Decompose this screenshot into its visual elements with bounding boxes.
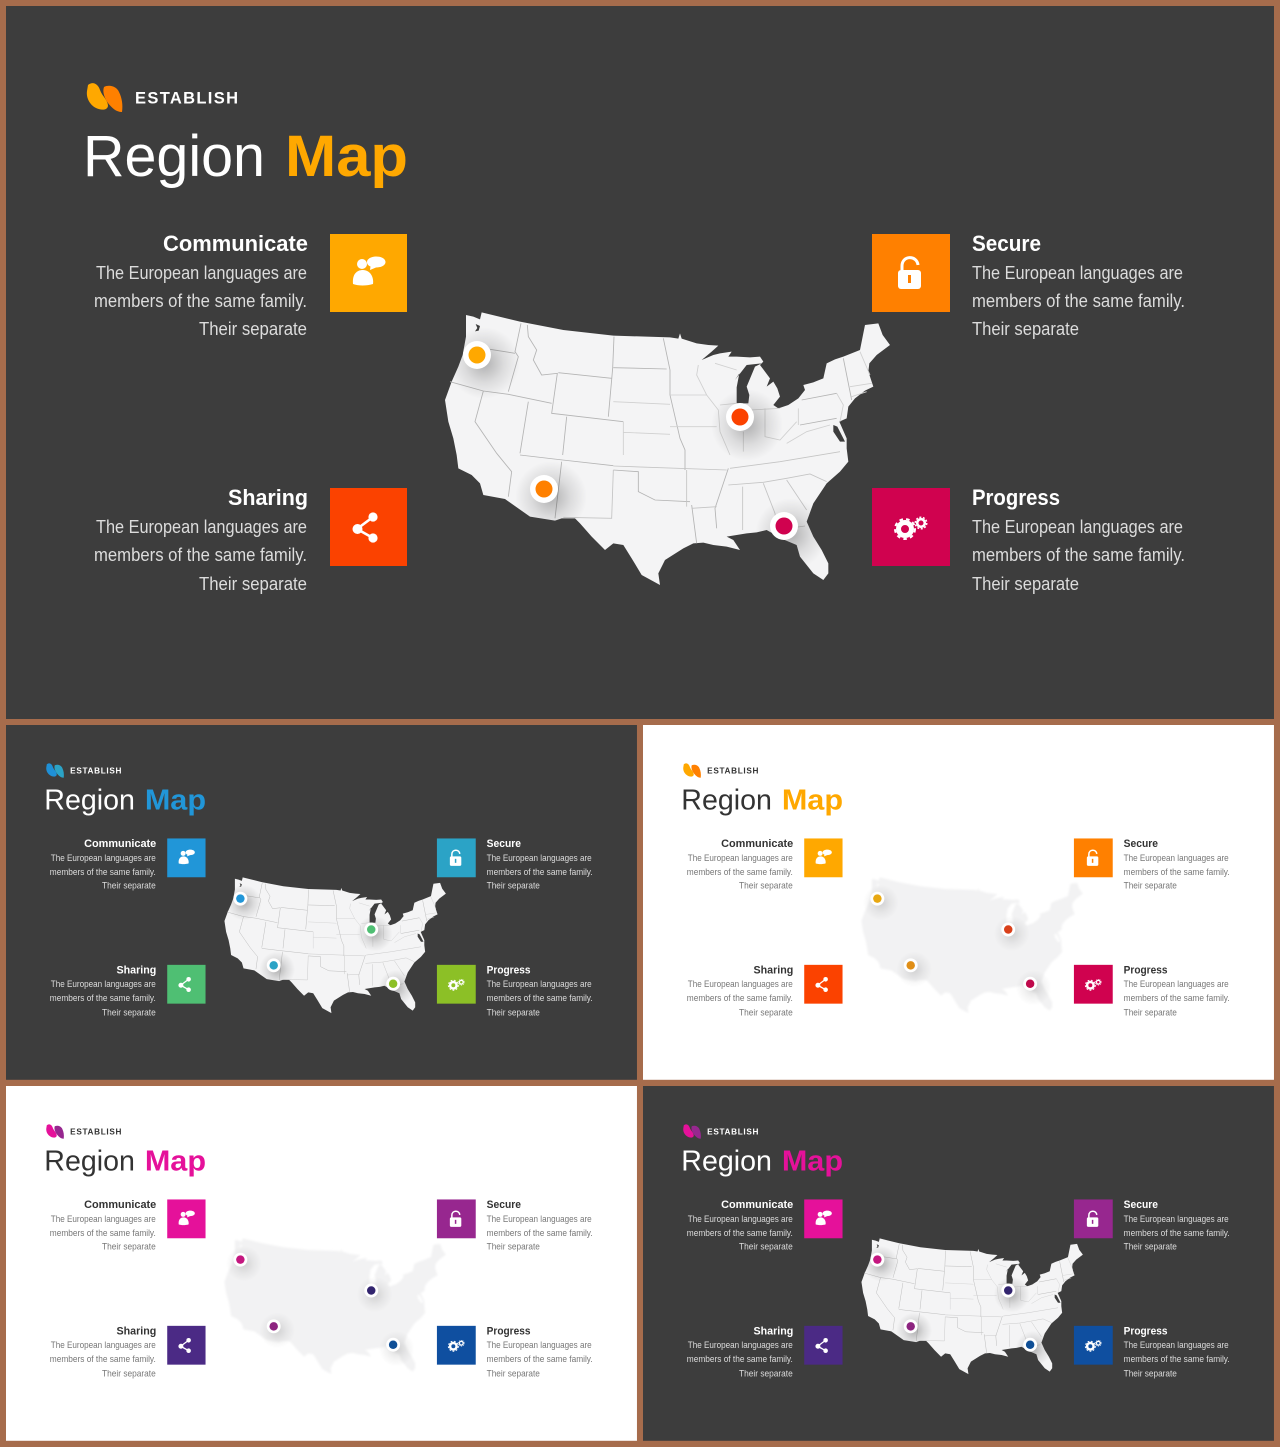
map of USA — [861, 877, 1083, 1013]
logo: ESTABLISH — [707, 1128, 759, 1137]
icon: secure — [1074, 838, 1113, 877]
text block: Progress: The European languages are — [1124, 979, 1229, 989]
text block: Progress: Progress — [487, 1325, 530, 1337]
logo: ESTABLISH — [135, 90, 238, 108]
map pin: Illinois — [364, 1284, 378, 1297]
map pin: Arizona — [904, 1319, 918, 1333]
text block: Sharing: members of the same family. — [50, 1354, 156, 1364]
text block: Sharing: Sharing — [753, 964, 793, 976]
text block: Communicate — [50, 838, 156, 891]
logo: ESTABLISH — [70, 1128, 122, 1137]
map pin: Oregon — [233, 1253, 247, 1267]
text block: Sharing: The European languages are — [688, 979, 793, 989]
panel: white orange slide — [643, 725, 1274, 1080]
text block: Secure: Their separate — [972, 319, 1079, 339]
text block: Secure: members of the same family. — [1124, 867, 1230, 877]
icon: communicate — [804, 838, 843, 877]
text block: Communicate: Their separate — [739, 1242, 793, 1252]
title — [681, 785, 843, 817]
text block: Progress: Progress — [1124, 964, 1167, 976]
text block: Communicate — [94, 231, 308, 339]
text block: Sharing — [50, 1325, 156, 1379]
text block: Communicate: Communicate — [84, 1199, 156, 1211]
title: Region — [44, 1146, 135, 1178]
map pin: Oregon — [870, 1253, 884, 1267]
icon: communicate — [330, 234, 407, 312]
text block: Communicate: The European languages are — [688, 1214, 793, 1224]
map pin: Georgia — [386, 977, 400, 991]
text block: Sharing: Their separate — [199, 574, 307, 594]
text block: Communicate: members of the same family. — [50, 867, 156, 877]
panel: dark pink slide — [643, 1086, 1274, 1441]
text block: Secure: Their separate — [487, 881, 540, 891]
text block: Communicate: Communicate — [163, 231, 308, 256]
text block: Progress: members of the same family. — [1124, 1354, 1230, 1364]
icon: progress — [872, 488, 950, 566]
icon: sharing — [167, 965, 206, 1004]
text block: Progress — [972, 485, 1185, 594]
text block: Communicate: Communicate — [721, 838, 793, 850]
text block: Progress: members of the same family. — [972, 545, 1185, 565]
text block: Sharing: The European languages are — [51, 1340, 156, 1350]
map pin: Illinois — [364, 923, 378, 936]
text block: Communicate: Their separate — [102, 881, 156, 891]
text block: Secure: The European languages are — [972, 263, 1183, 283]
panel: dark blue slide — [6, 725, 637, 1080]
text block: Progress: members of the same family. — [487, 1354, 593, 1364]
text block: Secure: Their separate — [1124, 881, 1177, 891]
title: Map — [285, 124, 408, 189]
text block: Sharing: Sharing — [116, 964, 156, 976]
text block: Secure: Their separate — [1124, 1242, 1177, 1252]
text block: Secure: Secure — [1124, 838, 1158, 850]
logo: ESTABLISH — [70, 767, 122, 776]
text block: Secure: Secure — [487, 838, 521, 850]
text block: Progress: The European languages are — [487, 979, 592, 989]
text block: Progress: Their separate — [1124, 1369, 1177, 1379]
map pin: Oregon — [463, 341, 491, 369]
title: Region — [83, 124, 265, 189]
map pin: Georgia — [386, 1338, 400, 1352]
title: Region — [681, 785, 772, 817]
map pin: Illinois — [726, 403, 754, 431]
icon: secure — [1074, 1199, 1113, 1238]
map pin: Illinois — [1001, 1284, 1015, 1297]
text block: Progress: members of the same family. — [487, 993, 593, 1003]
map pin: Arizona — [530, 475, 558, 503]
text block: Secure: members of the same family. — [487, 867, 593, 877]
text block: Progress — [1124, 1325, 1230, 1379]
text block: Sharing: members of the same family. — [94, 545, 307, 565]
text block: Secure — [487, 838, 593, 891]
logo — [683, 1124, 759, 1139]
text block: Communicate — [687, 1199, 793, 1252]
text block: Communicate — [50, 1199, 156, 1252]
title: Map — [145, 1146, 206, 1178]
map pin: Georgia — [1023, 1338, 1037, 1352]
icon: progress — [437, 965, 476, 1004]
text block: Secure: members of the same family. — [1124, 1228, 1230, 1238]
text block: Communicate: The European languages are — [51, 853, 156, 863]
map of USA — [445, 312, 890, 585]
text block: Communicate: The European languages are — [51, 1214, 156, 1224]
text block: Sharing — [50, 964, 156, 1018]
logo: ESTABLISH — [707, 767, 759, 776]
text block: Communicate — [687, 838, 793, 891]
text block: Secure: Secure — [1124, 1199, 1158, 1211]
text block: Communicate: Communicate — [84, 838, 156, 850]
text block: Secure: Secure — [487, 1199, 521, 1211]
text block: Progress: Their separate — [487, 1008, 540, 1018]
logo — [683, 763, 759, 778]
text block: Progress: Their separate — [972, 574, 1079, 594]
text block: Communicate: members of the same family. — [94, 291, 307, 311]
text block: Sharing: Sharing — [753, 1325, 793, 1337]
text block: Progress — [487, 964, 593, 1018]
text block: Progress — [1124, 964, 1230, 1018]
text block: Progress: Their separate — [487, 1369, 540, 1379]
text block: Secure: The European languages are — [1124, 853, 1229, 863]
text block: Progress: The European languages are — [1124, 1340, 1229, 1350]
text block: Secure — [1124, 1199, 1230, 1252]
text block: Sharing: Their separate — [102, 1008, 156, 1018]
map pin: Georgia — [770, 512, 798, 540]
map pin: Oregon — [870, 892, 884, 906]
icon: progress — [1074, 965, 1113, 1004]
text block: Sharing: members of the same family. — [50, 993, 156, 1003]
text block: Sharing: Sharing — [116, 1325, 156, 1337]
icon: sharing — [804, 965, 843, 1004]
logo — [87, 83, 238, 112]
map of USA — [224, 877, 446, 1013]
text block: Sharing — [94, 485, 308, 594]
text block: Secure — [487, 1199, 593, 1252]
text block: Communicate: Communicate — [721, 1199, 793, 1211]
text block: Sharing: Their separate — [739, 1008, 793, 1018]
text block: Communicate: Their separate — [102, 1242, 156, 1252]
text block: Communicate: The European languages are — [688, 853, 793, 863]
text block: Sharing: members of the same family. — [687, 1354, 793, 1364]
map pin: Georgia — [1023, 977, 1037, 991]
text block: Sharing: Their separate — [739, 1369, 793, 1379]
icon: sharing — [167, 1326, 206, 1365]
text block: Progress: Progress — [1124, 1325, 1167, 1337]
text block: Sharing: The European languages are — [51, 979, 156, 989]
text block: Sharing: members of the same family. — [687, 993, 793, 1003]
text block: Communicate: Their separate — [199, 319, 307, 339]
text block: Sharing: Their separate — [102, 1369, 156, 1379]
icon: communicate — [167, 838, 206, 877]
icon: communicate — [167, 1199, 206, 1238]
title: Map — [145, 785, 206, 817]
text block: Secure: members of the same family. — [487, 1228, 593, 1238]
text block: Progress: Their separate — [1124, 1008, 1177, 1018]
text block: Sharing — [687, 964, 793, 1018]
text block: Communicate: The European languages are — [96, 263, 307, 283]
text block: Secure: members of the same family. — [972, 291, 1185, 311]
text block: Secure: The European languages are — [1124, 1214, 1229, 1224]
title — [44, 1146, 206, 1178]
title — [44, 785, 206, 817]
panel: white pink slide — [6, 1086, 637, 1441]
icon: progress — [437, 1326, 476, 1365]
text block: Communicate: members of the same family. — [50, 1228, 156, 1238]
text block: Secure: Secure — [972, 231, 1041, 256]
text block: Communicate: members of the same family. — [687, 1228, 793, 1238]
icon: sharing — [330, 488, 407, 566]
text block: Communicate: members of the same family. — [687, 867, 793, 877]
map of USA — [861, 1238, 1083, 1374]
text block: Communicate: Their separate — [739, 881, 793, 891]
logo — [46, 1124, 122, 1139]
text block: Progress: Progress — [487, 964, 530, 976]
text block: Secure: The European languages are — [487, 853, 592, 863]
map pin: Arizona — [267, 958, 281, 972]
text block: Progress — [487, 1325, 593, 1379]
map pin: Illinois — [1001, 923, 1015, 936]
icon: progress — [1074, 1326, 1113, 1365]
logo — [46, 763, 122, 778]
text block: Sharing: The European languages are — [688, 1340, 793, 1350]
map pin: Arizona — [267, 1319, 281, 1333]
text block: Secure — [972, 231, 1185, 339]
text block: Progress: The European languages are — [972, 517, 1183, 537]
title — [681, 1146, 843, 1178]
title: Region — [681, 1146, 772, 1178]
text block: Progress: Progress — [972, 485, 1060, 510]
title: Region — [44, 785, 135, 817]
map of USA — [224, 1238, 446, 1374]
text block: Sharing: Sharing — [228, 485, 308, 510]
text block: Secure — [1124, 838, 1230, 891]
icon: secure — [872, 234, 950, 312]
panel: main dark orange slide — [6, 6, 1274, 719]
icon: secure — [437, 838, 476, 877]
title: Map — [782, 785, 843, 817]
text block: Progress: members of the same family. — [1124, 993, 1230, 1003]
text block: Secure: The European languages are — [487, 1214, 592, 1224]
map pin: Arizona — [904, 958, 918, 972]
title: Map — [782, 1146, 843, 1178]
title — [83, 124, 408, 189]
map pin: Oregon — [233, 892, 247, 906]
text block: Sharing: The European languages are — [96, 517, 307, 537]
icon: communicate — [804, 1199, 843, 1238]
text block: Sharing — [687, 1325, 793, 1379]
text block: Progress: The European languages are — [487, 1340, 592, 1350]
icon: secure — [437, 1199, 476, 1238]
text block: Secure: Their separate — [487, 1242, 540, 1252]
icon: sharing — [804, 1326, 843, 1365]
